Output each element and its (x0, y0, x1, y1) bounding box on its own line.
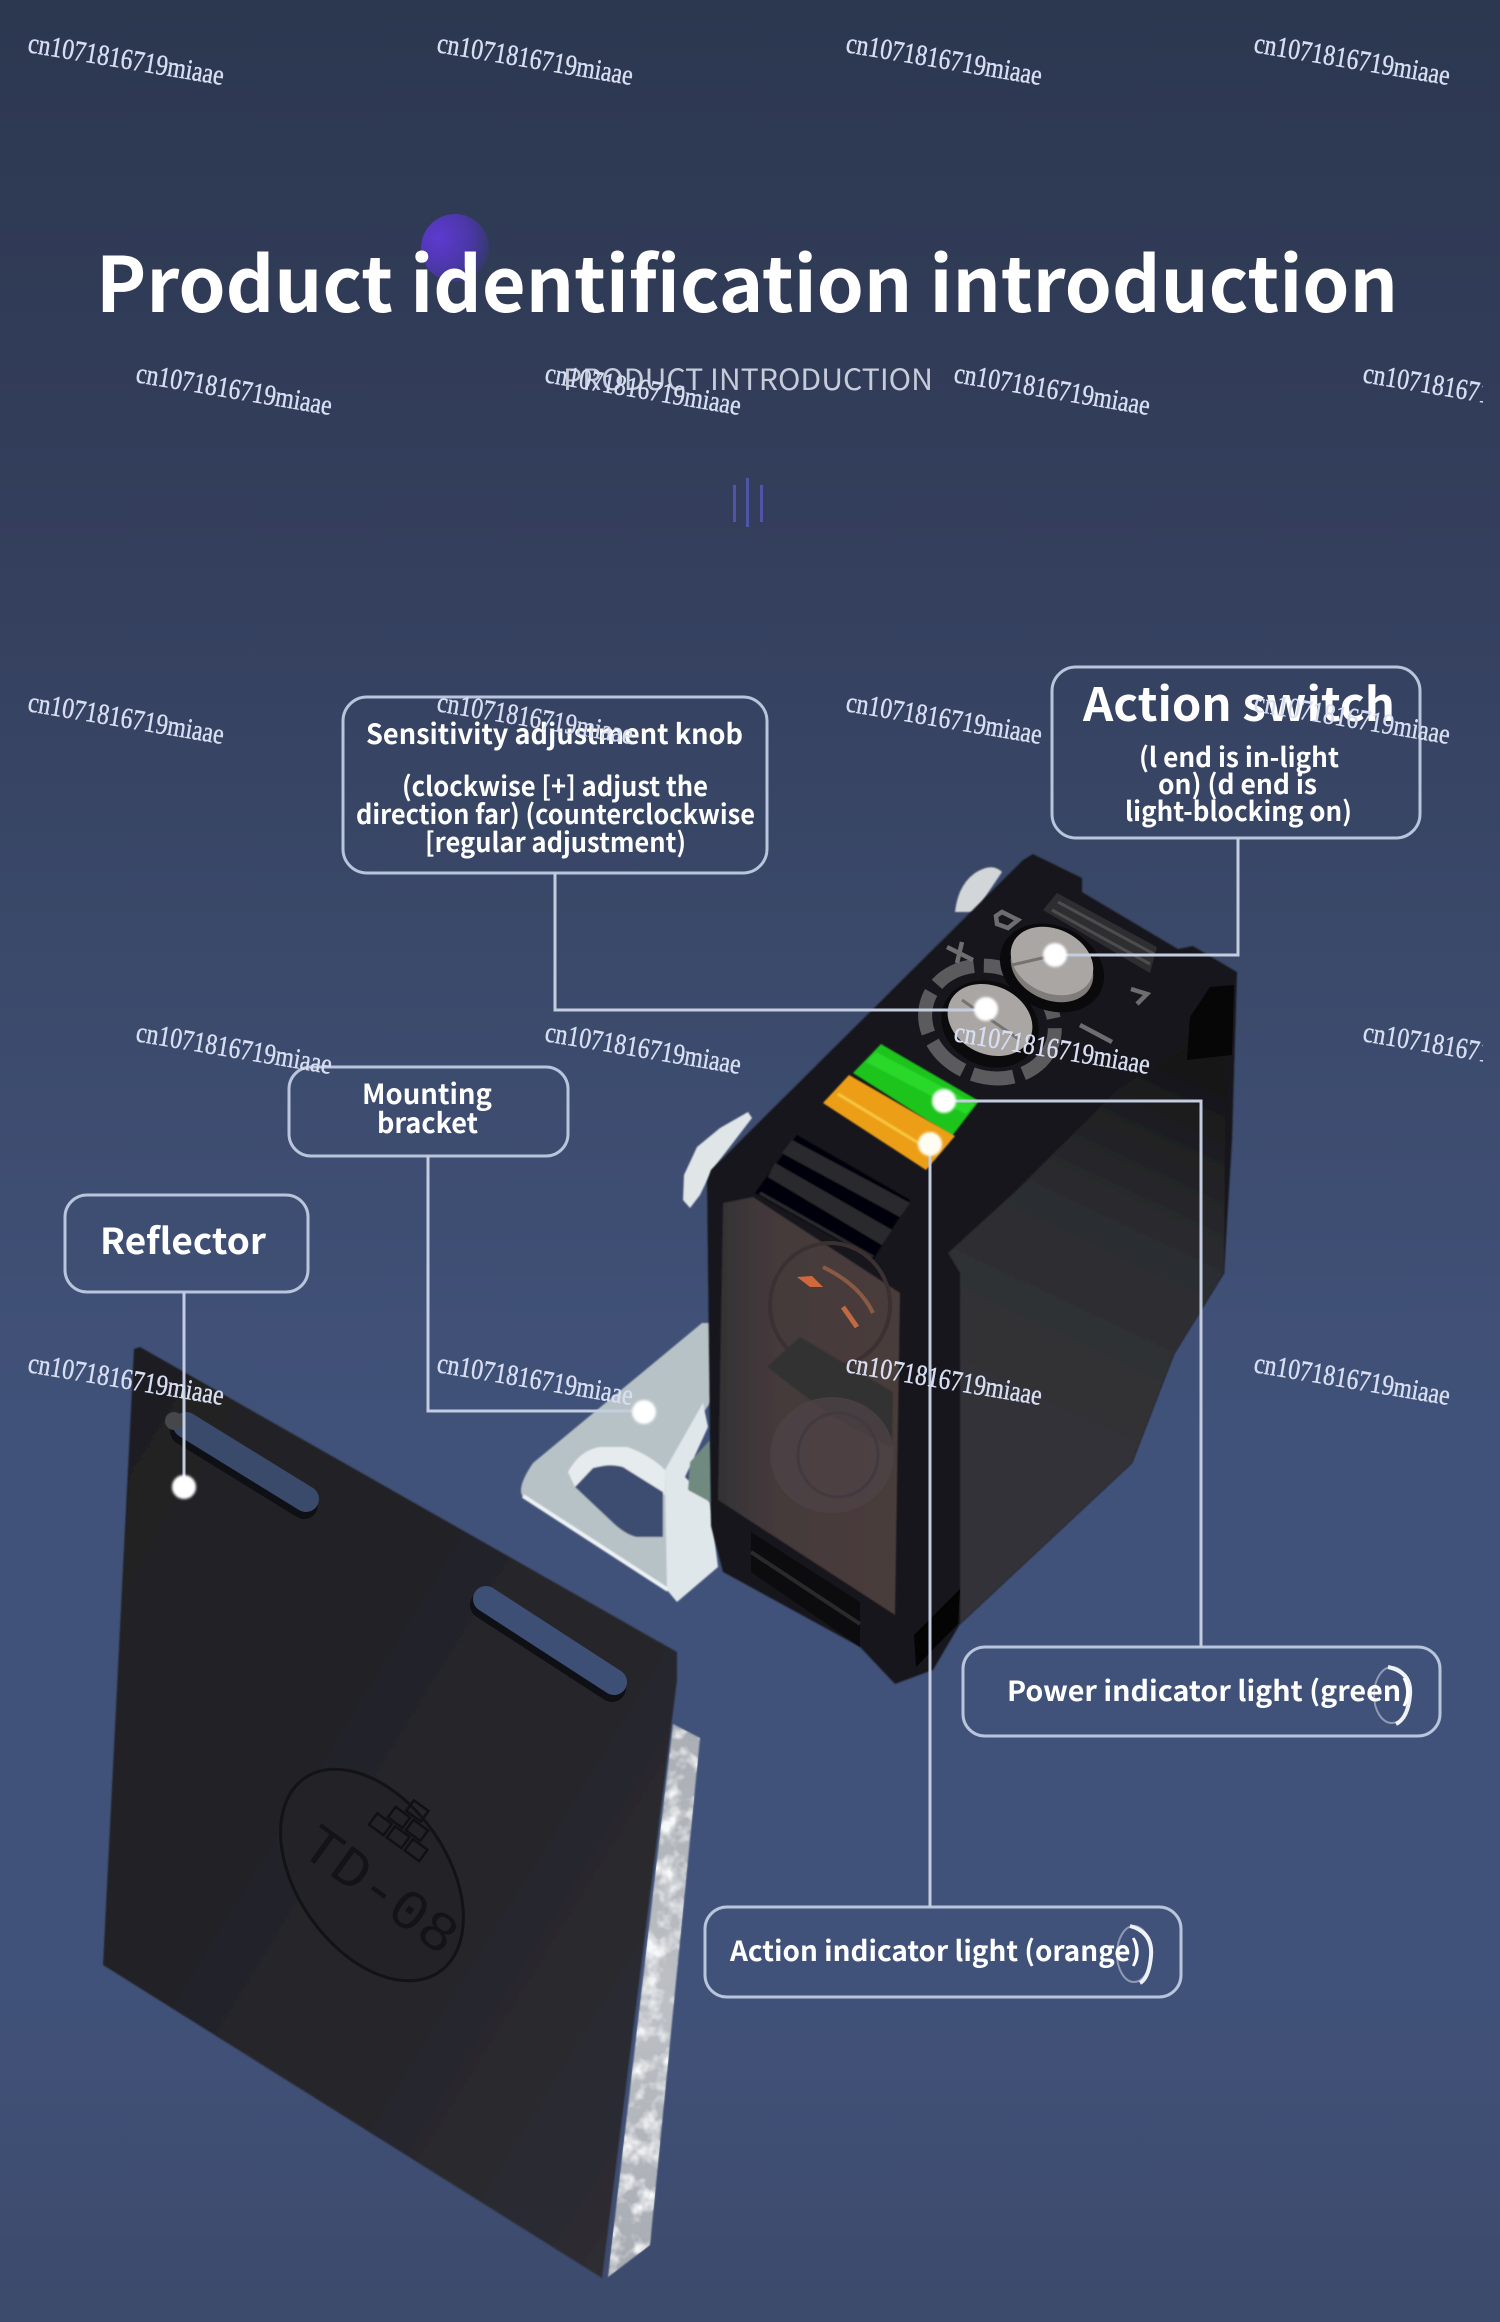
callout: sensitivity adjustment knob: Sensitivity adjustment knob (366, 713, 743, 753)
sensor side panel (948, 1040, 1226, 1624)
front lens window (718, 1197, 900, 1615)
sensor top screw (955, 867, 1002, 912)
watermarks: cn1071816719miaae (134, 357, 334, 422)
callout: power indicator light: Power indicator light (green) (1007, 1670, 1412, 1710)
watermarks: cn1071816719miaae (844, 27, 1044, 92)
bottom corner notch (914, 1589, 960, 1667)
callout: reflector: Reflector (100, 1213, 266, 1265)
power indicator green (853, 1044, 979, 1136)
ring icon (1374, 1667, 1410, 1724)
callout: action switch: (l end is in-light (1139, 736, 1339, 775)
watermarks: cn1071816719miaae (26, 27, 226, 92)
watermarks: cn1071816719miaae (26, 686, 226, 751)
adjustment knob ring segments (909, 948, 1071, 1096)
bracket vertical white fold (665, 1403, 718, 1602)
watermarks: cn1071816719miaae (1252, 1347, 1452, 1412)
mounting bracket (521, 1323, 718, 1602)
callout: action switch (1052, 667, 1420, 838)
watermarks: cn1071816719miaae (26, 1347, 226, 1412)
leader line: mounting bracket (428, 1156, 656, 1424)
front bottom grille (751, 1532, 860, 1647)
callout: action indicator light (705, 1907, 1181, 1997)
watermarks: cn1071816719miaae (435, 686, 635, 751)
bracket inner shadow (688, 1440, 712, 1503)
callout: mounting bracket (289, 1067, 568, 1156)
leader line: sensitivity knob (555, 873, 998, 1021)
bracket plate (521, 1323, 712, 1590)
callout: action switch: light-blocking on) (1125, 790, 1352, 829)
sensor rear bracket flange (683, 1112, 752, 1208)
sensitivity knob (927, 965, 1053, 1083)
leader line: action switch (1043, 838, 1238, 967)
reflector embossed logo (243, 1735, 501, 2015)
sensor body silhouette (707, 854, 1237, 1684)
reflector bolt (165, 1412, 183, 1430)
watermarks: cn1071816719miaae (1252, 686, 1452, 751)
action indicator orange (823, 1075, 955, 1170)
sensor top grille (1043, 893, 1157, 973)
watermarks: cn1071816719miaae (952, 357, 1152, 422)
callout: action switch: on) (d end is (1158, 763, 1317, 802)
leader line: reflector (172, 1292, 196, 1499)
icon: three vertical bars (733, 478, 763, 527)
callout: action indicator light: Action indicator light (orange) (729, 1930, 1141, 1970)
bracket white arch (568, 1447, 665, 1495)
reflector black face (103, 1347, 677, 2278)
watermarks: cn1071816719miaae (435, 1347, 635, 1412)
watermarks: cn1071816719miaae (134, 1016, 334, 1081)
callout: mounting bracket: Mounting (362, 1073, 492, 1113)
watermarks: cn1071816719miaae (952, 1016, 1152, 1081)
leader line: power indicator (932, 1089, 1201, 1647)
bracket plate lower edge (523, 1496, 668, 1590)
decorative purple orb (421, 214, 489, 282)
reflector top slot right (484, 1599, 614, 1688)
title: Product identification introduction (96, 224, 1398, 334)
watermarks: cn1071816719miaae (844, 1347, 1044, 1412)
reflector plate (103, 1347, 700, 2278)
callout: reflector (65, 1195, 308, 1292)
callout: sensitivity adjustment knob: direction far) (counterclockwise (356, 793, 755, 832)
callout: sensitivity adjustment knob: (clockwise [+] adjust the (402, 765, 708, 804)
callout: power indicator light (963, 1647, 1440, 1736)
leader line: action indicator (918, 1132, 942, 1907)
switch markings (947, 912, 1147, 1042)
callout: action switch: Action switch (1082, 669, 1395, 735)
callout: mounting bracket: bracket (377, 1102, 478, 1142)
sensor right mounting hole (1187, 985, 1234, 1060)
watermarks: cn1071816719miaae (543, 1016, 743, 1081)
watermarks (26, 27, 1500, 1412)
callout: sensitivity adjustment knob (343, 697, 767, 873)
watermarks: cn1071816719miaae (1252, 27, 1452, 92)
subtitle: PRODUCT INTRODUCTION (563, 357, 933, 399)
reflector top slot left (184, 1425, 306, 1505)
watermarks: cn1071816719miaae (844, 686, 1044, 751)
watermarks: cn1071816719miaae (435, 27, 635, 92)
action switch knob (985, 907, 1119, 1029)
front top grille (755, 1135, 910, 1260)
ring icon (1117, 1926, 1151, 1983)
photoelectric sensor (683, 854, 1237, 1684)
watermarks: cn1071816719miaae (543, 357, 743, 422)
callout: sensitivity adjustment knob: [regular adjustment) (425, 821, 686, 860)
bracket hole (575, 1465, 663, 1537)
reflector embossed logo: TD-08 (288, 1814, 470, 1970)
reflector silver side (608, 1724, 700, 2277)
